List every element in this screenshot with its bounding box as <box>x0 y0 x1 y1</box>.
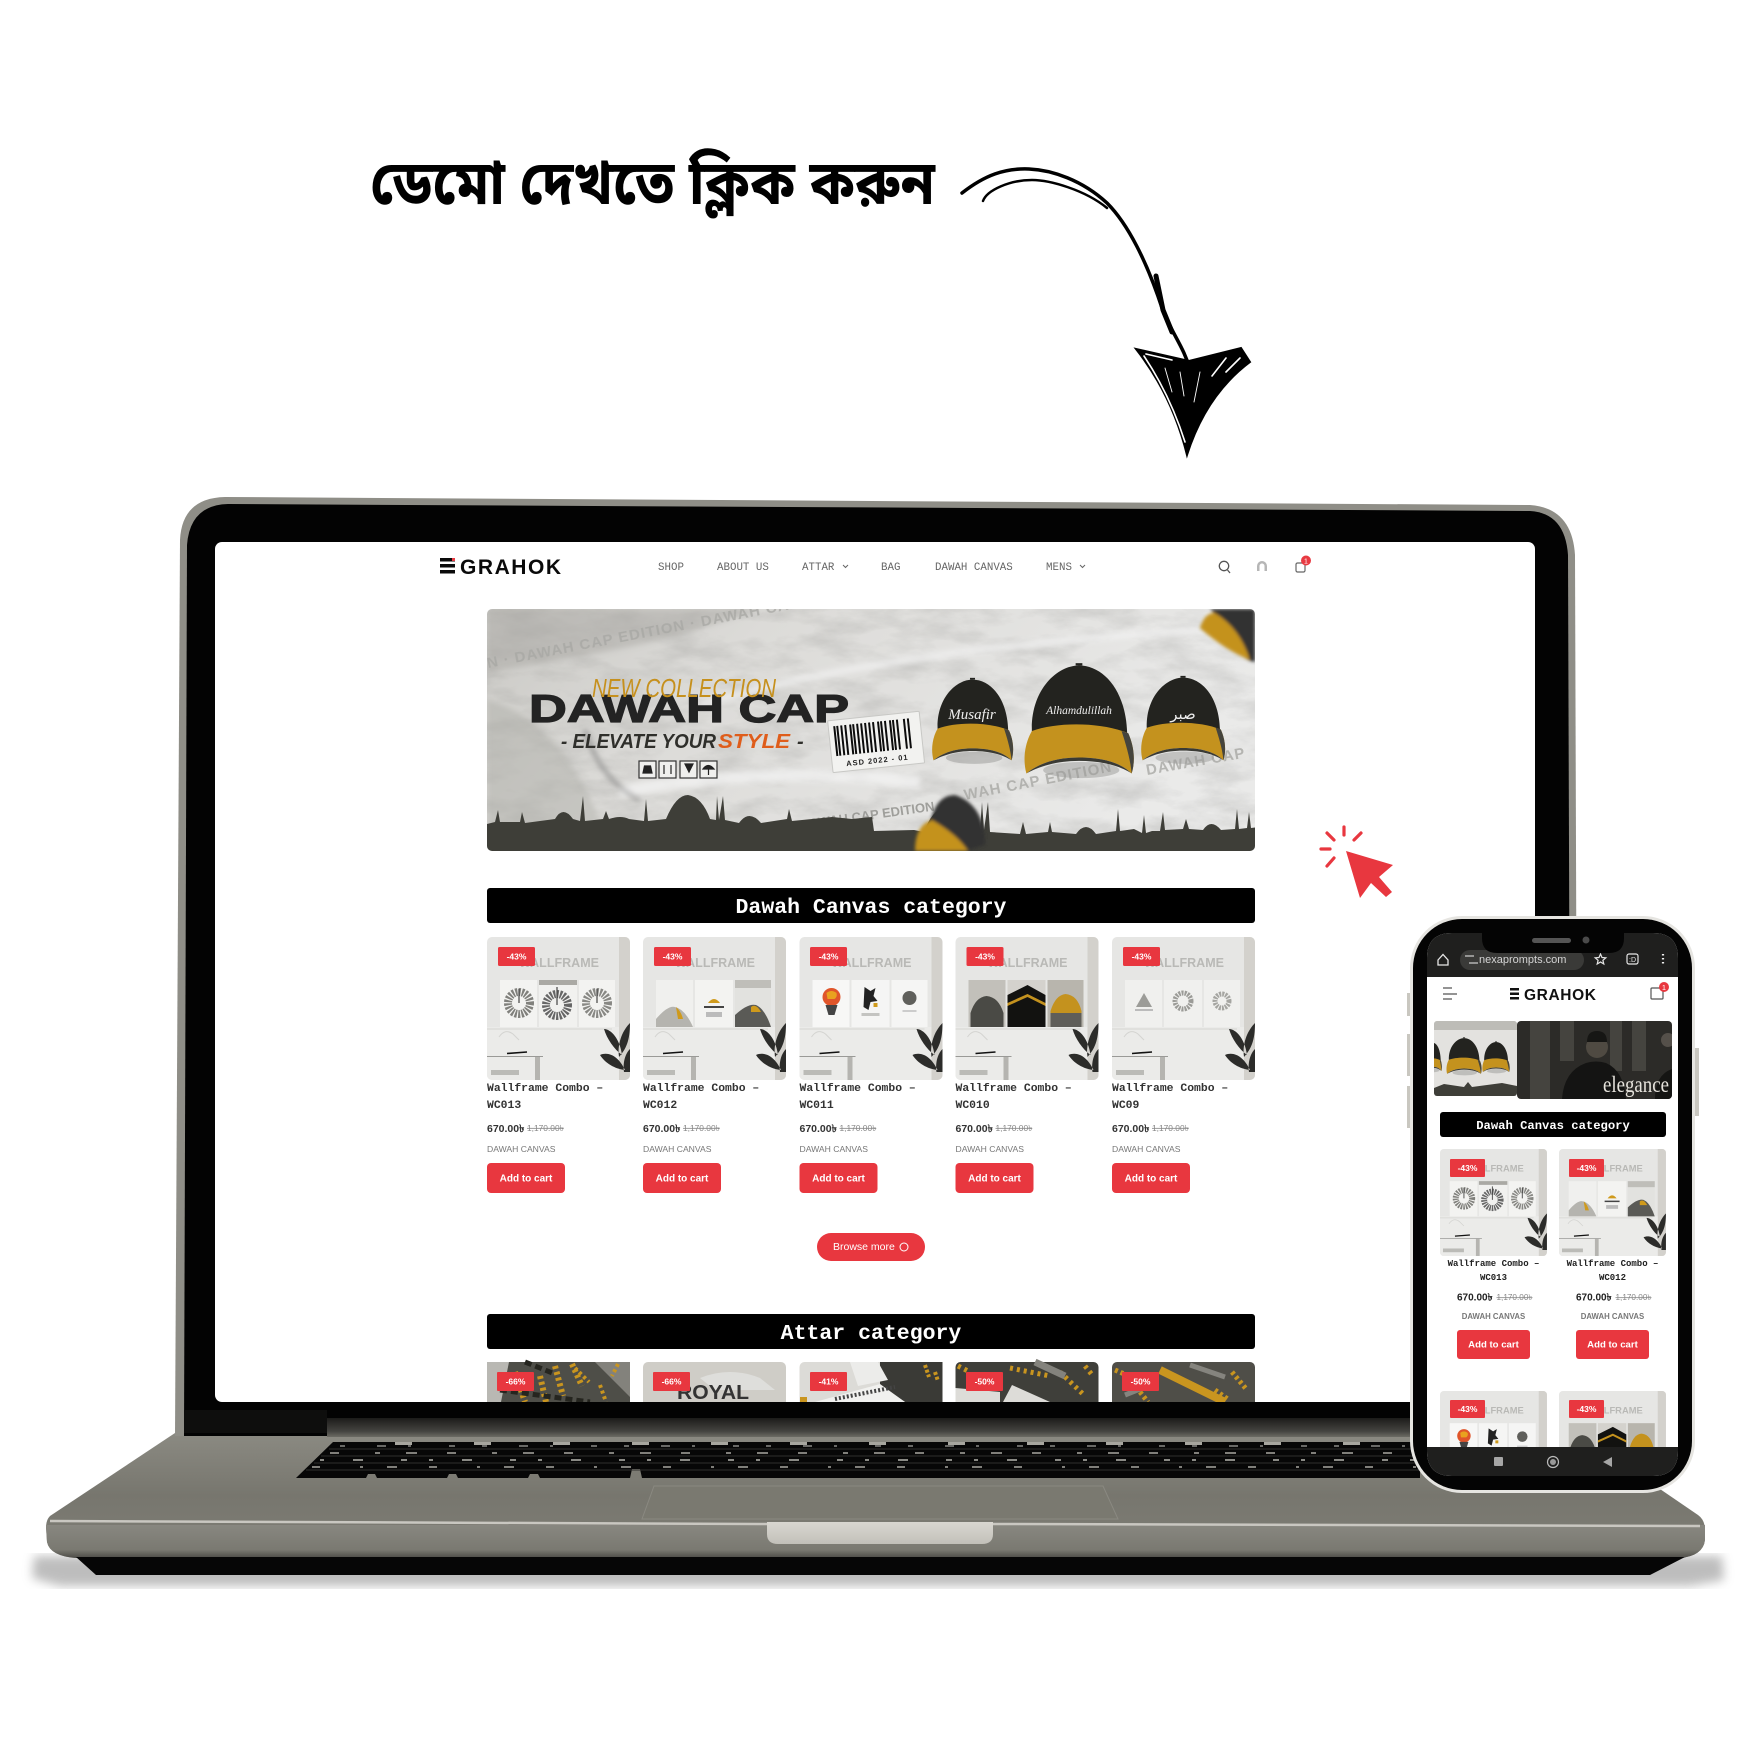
phone photo slide <box>1517 1021 1675 1099</box>
category: DAWAH CANVAS <box>487 1144 556 1154</box>
cap: Musafir <box>932 678 1013 764</box>
barcode label: ASD 2022 - 01 <box>846 753 909 768</box>
discount badge <box>1450 1159 1485 1177</box>
product name: WC09 <box>1112 1100 1140 1112</box>
discount badge <box>1569 1159 1604 1177</box>
product image <box>643 937 786 1080</box>
phone section heading: Dawah Canvas category <box>1476 1119 1630 1133</box>
nav links: ABOUT US <box>717 562 769 574</box>
price: 670.00৳ <box>800 1123 838 1135</box>
icon: user <box>1257 561 1267 571</box>
category: DAWAH CANVAS <box>800 1144 868 1154</box>
section: Dawah Canvas category heading: Dawah Canvas category <box>736 896 1007 920</box>
category: DAWAH CANVAS <box>1112 1144 1181 1154</box>
nav links <box>658 562 1085 574</box>
add to cart button: Add to cart <box>1125 1174 1178 1184</box>
attar badge 3 <box>810 1372 847 1391</box>
phone product card WC012 <box>1559 1149 1666 1359</box>
banner title: NEW COLLECTION <box>592 673 776 703</box>
cap: Sabr: صبر <box>1169 705 1196 723</box>
nav links: DAWAH CANVAS <box>935 562 1013 574</box>
base highlight line <box>50 1521 1700 1526</box>
phone product cards row 2 <box>1440 1391 1666 1498</box>
add to cart button: Add to cart <box>1468 1340 1520 1350</box>
add to cart button: Add to cart <box>500 1174 553 1184</box>
discount badge <box>498 947 535 966</box>
phone body edge <box>1410 916 1695 1493</box>
price <box>487 1123 564 1135</box>
logo: GRAHOK <box>460 556 561 579</box>
attar badge 5: -50% <box>1131 1376 1151 1386</box>
front notch <box>767 1522 993 1544</box>
section: Dawah Canvas category heading <box>487 888 1255 923</box>
nav links: MENS <box>1046 562 1072 574</box>
add to cart button <box>643 1163 721 1193</box>
product image <box>956 937 1098 1080</box>
discount badge: -43% <box>507 952 527 962</box>
price <box>643 1123 720 1135</box>
laptop screen <box>215 542 1535 1402</box>
attar image 5 <box>1112 1362 1255 1422</box>
icon: cart with badge: 1 <box>1304 558 1308 566</box>
barcode label <box>828 711 925 773</box>
attar image 4 <box>956 1362 1098 1422</box>
product name: WC012 <box>1599 1273 1626 1283</box>
blurred cap top right <box>1200 609 1255 662</box>
nav links: BAG <box>881 562 900 574</box>
phone screen <box>1427 933 1678 1476</box>
browser icon: menu dots <box>1662 954 1664 964</box>
cap: Alhamdulillah: Alhamdulillah <box>1045 705 1112 717</box>
add to cart button: Add to cart <box>656 1174 709 1184</box>
blurred cap foreground <box>915 795 985 851</box>
price <box>1112 1123 1189 1135</box>
keyboard <box>296 1442 1420 1478</box>
product image <box>1559 1149 1666 1256</box>
discount badge: -43% <box>663 952 683 962</box>
phone cart icon: 1 <box>1662 983 1666 992</box>
product image left <box>1440 1391 1547 1498</box>
phone mini banner <box>1424 1021 1517 1096</box>
add to cart button <box>956 1163 1034 1193</box>
laptop lid bezel <box>184 504 1571 1436</box>
attar image 1 <box>487 1360 630 1402</box>
attar product row <box>487 1359 1255 1402</box>
phone url pill <box>1460 950 1584 970</box>
product card WC010 <box>956 937 1098 1193</box>
icon: cart with badge <box>1296 556 1311 572</box>
laptop base deck <box>46 1433 1705 1558</box>
discount badge left: -43% <box>1458 1404 1478 1414</box>
category: DAWAH CANVAS <box>643 1144 712 1154</box>
product card WC013 <box>487 937 630 1193</box>
phone bottom nav bar <box>1427 1447 1678 1476</box>
discount badge <box>1123 947 1160 966</box>
product card WC012 <box>643 937 786 1193</box>
section: Attar category heading: Attar category <box>781 1322 961 1346</box>
banner ghost text: DAWAH CAP <box>1145 745 1247 779</box>
price: 1,170.00৳ <box>996 1123 1032 1133</box>
category: DAWAH CANVAS <box>1462 1312 1525 1321</box>
price <box>956 1123 1032 1135</box>
nav links: SHOP <box>658 562 684 574</box>
browser icon: tabs: :D <box>1629 957 1636 964</box>
product name: Wallframe Combo – <box>1567 1259 1658 1269</box>
add to cart button <box>487 1163 565 1193</box>
price: 670.00৳ <box>1576 1292 1612 1304</box>
discount badge <box>654 947 691 966</box>
add to cart button: Add to cart <box>1587 1340 1639 1350</box>
phone logo: GRAHOK <box>1524 987 1597 1004</box>
category: DAWAH CANVAS <box>956 1144 1024 1154</box>
discount badge right: -43% <box>1577 1404 1597 1414</box>
attar badge 1 <box>497 1372 534 1391</box>
add to cart button <box>1576 1330 1649 1359</box>
price: 1,170.00৳ <box>683 1123 720 1133</box>
browse more button: Browse more <box>833 1241 895 1253</box>
price: 670.00৳ <box>643 1123 681 1135</box>
product name: Wallframe Combo – <box>1112 1083 1228 1095</box>
banner title <box>529 673 849 731</box>
icon: red click cursor <box>1321 827 1393 898</box>
banner tagline: STYLE <box>718 731 791 753</box>
banner ghost text: WAH CAP EDITION <box>963 759 1114 804</box>
product name: WC010 <box>956 1100 990 1112</box>
discount badge <box>966 947 1004 966</box>
discount badge: -43% <box>975 952 995 962</box>
price: 1,170.00৳ <box>840 1123 876 1133</box>
product image <box>487 937 630 1080</box>
banner paper folds <box>487 609 1200 840</box>
discount badge: -43% <box>1132 952 1152 962</box>
phone browser bar <box>1427 933 1678 977</box>
attar image 3 <box>800 1362 942 1402</box>
product name: WC011 <box>800 1100 834 1112</box>
discount badge <box>810 947 847 966</box>
phone url pill: nexaprompts.com <box>1479 954 1566 966</box>
product name: WC013 <box>487 1100 521 1112</box>
trackpad <box>642 1486 1118 1519</box>
discount badge right <box>1569 1400 1604 1418</box>
banner tagline: - ELEVATE YOUR <box>561 731 717 753</box>
add to cart button: Add to cart <box>968 1174 1022 1184</box>
price: 670.00৳ <box>1112 1123 1150 1135</box>
add to cart button: Add to cart <box>812 1174 866 1184</box>
phone product card WC013 <box>1440 1149 1547 1359</box>
price: 1,170.00৳ <box>1616 1293 1651 1302</box>
laptop base front edge <box>46 1525 1705 1558</box>
laptop lid outer edge <box>175 497 1578 1436</box>
phone <box>1407 916 1699 1498</box>
banner silhouette skyline <box>487 795 1259 851</box>
attar badge 2: -66% <box>662 1376 682 1386</box>
product name: Wallframe Combo – <box>956 1083 1072 1095</box>
laptop <box>32 497 1724 1586</box>
attar badge 1: -66% <box>506 1376 526 1386</box>
price: 670.00৳ <box>956 1123 994 1135</box>
icon: search <box>1219 561 1230 573</box>
attar badge 4 <box>966 1372 1003 1391</box>
phone section heading <box>1440 1112 1666 1137</box>
nav links: ATTAR <box>802 562 835 574</box>
discount badge left <box>1450 1400 1485 1418</box>
phone notch <box>1482 925 1624 953</box>
add to cart button <box>800 1163 878 1193</box>
base underside <box>76 1557 1685 1575</box>
attar badge 2 <box>653 1372 690 1391</box>
product card WC09 <box>1112 937 1255 1193</box>
add to cart button <box>1457 1330 1530 1359</box>
category: DAWAH CANVAS <box>1581 1312 1644 1321</box>
price: 670.00৳ <box>487 1123 525 1135</box>
browse more button <box>817 1233 925 1261</box>
product image <box>1440 1149 1547 1256</box>
banner tagline: - <box>797 731 804 753</box>
product name: WC012 <box>643 1100 677 1112</box>
banner ghost text <box>487 609 1244 820</box>
discount badge: -43% <box>819 952 839 962</box>
laptop shadow <box>32 1556 1724 1586</box>
phone bezel <box>1413 919 1692 1490</box>
cap: Musafir: Musafir <box>947 707 996 723</box>
product image right <box>1559 1391 1666 1498</box>
product name: WC013 <box>1480 1273 1507 1283</box>
banner paper texture <box>487 609 1255 851</box>
section: Attar category heading <box>487 1314 1255 1349</box>
product image <box>1112 937 1255 1080</box>
phone cart icon <box>1651 982 1669 999</box>
price: 670.00৳ <box>1457 1292 1493 1304</box>
attar badge 3: -41% <box>819 1376 839 1386</box>
website nav bar <box>440 556 1311 579</box>
product image <box>800 937 942 1080</box>
phone side buttons <box>1407 993 1699 1128</box>
banner ghost text: AWAH CAP EDITION <box>808 799 935 831</box>
browser icon: star <box>1595 954 1606 964</box>
phone photo slide: elegance <box>1603 1072 1669 1097</box>
product card WC011 <box>800 937 942 1193</box>
attar badge 5 <box>1122 1372 1159 1391</box>
browser icon: home <box>1438 954 1448 965</box>
price <box>800 1123 876 1135</box>
discount badge: -43% <box>1458 1163 1478 1173</box>
price: 1,170.00৳ <box>527 1123 564 1133</box>
price <box>1576 1292 1651 1304</box>
attar badge 4: -50% <box>975 1376 995 1386</box>
product name: Wallframe Combo – <box>800 1083 916 1095</box>
banner ghost text: N · DAWAH CAP EDITION · DAWAH CAP EDITION <box>486 581 873 672</box>
hinge <box>327 1418 1577 1437</box>
price: 1,170.00৳ <box>1152 1123 1189 1133</box>
attar image 2 <box>643 1362 786 1402</box>
arrow: hand-drawn pointing down to the laptop <box>962 169 1250 455</box>
price: 1,170.00৳ <box>1496 1293 1532 1302</box>
browser icon: tabs <box>1627 954 1638 964</box>
add to cart button <box>1112 1163 1190 1193</box>
cap: Alhamdulillah <box>1025 663 1134 778</box>
banner tagline <box>562 734 804 748</box>
hero banner: Dawah Cap <box>486 581 1259 851</box>
heading: click to see demo: ডেমো দেখতে ক্লিক করুন <box>370 148 936 230</box>
product name: Wallframe Combo – <box>1448 1259 1539 1269</box>
discount badge: -43% <box>1577 1163 1597 1173</box>
product name: Wallframe Combo – <box>643 1083 759 1095</box>
product name: Wallframe Combo – <box>487 1083 603 1095</box>
phone hamburger icon <box>1443 988 1457 999</box>
price <box>1457 1292 1532 1304</box>
cap: Sabr <box>1141 676 1225 764</box>
banner title: DAWAH CAP <box>529 688 849 731</box>
lower bezel left <box>184 1410 327 1433</box>
banner package icons <box>639 761 717 778</box>
attar image 2: ROYAL <box>677 1382 749 1404</box>
